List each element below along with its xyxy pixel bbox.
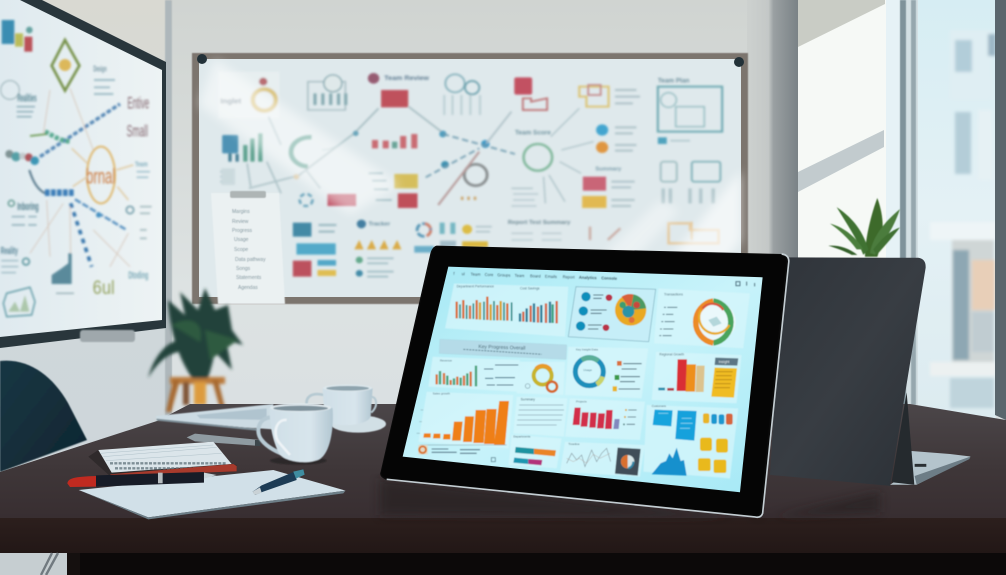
desk top — [0, 404, 1006, 518]
notebook red cover — [110, 464, 237, 476]
board mind-map drawing: Entive — [127, 93, 149, 112]
board mind-map drawing: Realities — [17, 93, 37, 105]
board mind-map drawing — [1, 20, 152, 317]
laptop behind the tablet — [770, 257, 971, 486]
small bar chart — [437, 359, 518, 386]
screen nav bar: Team — [515, 273, 525, 278]
laptop keyboard base — [890, 451, 971, 485]
blurred building — [930, 30, 996, 408]
donut chart: blue: Key Insight Data — [576, 347, 598, 351]
board infographic drawing: Team Review — [384, 75, 430, 82]
screen nav bar: Report — [563, 274, 576, 280]
screen nav bar: Analytics — [579, 275, 598, 280]
desk front edge — [0, 518, 1006, 553]
clipboard list text: Usage — [234, 237, 249, 243]
bar chart: grouped bars top left: Cost Savings — [520, 287, 540, 291]
board infographic drawing — [219, 72, 722, 277]
screen nav bar: Team — [471, 271, 481, 277]
screen glow panels — [418, 283, 750, 478]
banner heading: Key Progress Overall — [478, 344, 526, 352]
screen nav bar: Core — [485, 272, 494, 277]
stacked color strips: Departments — [513, 435, 531, 439]
cup handle — [307, 394, 324, 404]
text summary block: Summary — [521, 398, 535, 402]
coffee cup and saucer: back — [307, 384, 386, 433]
plant behind laptop — [828, 198, 900, 257]
left wall — [0, 0, 172, 470]
left whiteboard — [0, 0, 166, 348]
large orange bar chart — [417, 392, 509, 445]
clipboard clip — [230, 191, 266, 198]
ring chart: yellow — [525, 366, 557, 392]
clipboard list text: Songs — [236, 266, 251, 272]
blue info cards — [652, 404, 733, 441]
clipboard list text: Progress — [232, 228, 253, 234]
wall corner — [165, 0, 172, 420]
structural column — [747, 0, 798, 270]
cup body — [323, 385, 373, 425]
column chart: red orange tan — [658, 353, 705, 392]
blue info cards: Customers — [652, 404, 667, 408]
center whiteboard — [192, 53, 748, 304]
board tray — [80, 330, 135, 342]
tablet silver edge — [387, 254, 789, 517]
clipboard list text: Statements — [236, 275, 262, 281]
small bar chart: Revenue — [440, 359, 452, 363]
notebook — [88, 442, 237, 476]
donut legend — [617, 361, 622, 366]
board infographic drawing: Inglet — [220, 97, 242, 105]
banner heading — [439, 339, 567, 359]
board mind-map drawing: Team — [135, 160, 148, 169]
screen nav bar: Board — [530, 273, 541, 279]
screen contents — [417, 271, 755, 478]
board mind-map drawing: Dtoding — [128, 270, 148, 281]
cup shadow — [270, 457, 327, 465]
line chart: Timeline — [568, 442, 580, 446]
blue area chart — [652, 448, 687, 476]
bar chart: grouped bars top left — [457, 285, 557, 323]
screen nav icons — [736, 282, 755, 286]
window right frame — [995, 0, 1006, 420]
clipboard list text: Data pathway — [235, 257, 266, 263]
screen nav bar: Emails — [545, 274, 557, 279]
window: right pane with blurred building — [918, 0, 996, 420]
dark gauge card — [615, 448, 641, 476]
bar chart: grouped bars top left: Department Performance — [457, 285, 494, 289]
clipboard note — [211, 191, 285, 304]
insight card — [711, 358, 738, 398]
sunlight shafts on board — [199, 59, 741, 297]
cup body — [269, 404, 333, 462]
footer icon and summary — [418, 445, 495, 462]
tablet screen — [403, 267, 763, 492]
donut chart: blue — [575, 347, 642, 391]
board frame — [0, 0, 166, 348]
red bar chart: Projects — [576, 399, 587, 403]
plant stool — [166, 377, 226, 412]
sunlight shadow band: top — [798, 0, 885, 47]
screen nav bar: f — [453, 271, 455, 276]
notebook handwriting — [110, 463, 230, 468]
coffee cup: front — [258, 403, 333, 465]
board mind-map drawing: Small — [127, 122, 148, 141]
clipboard list text: Review — [232, 219, 249, 225]
cup handle — [258, 417, 287, 455]
board frame — [192, 53, 748, 304]
board infographic drawing: Team Score — [515, 130, 551, 137]
tablet with dashboard — [380, 246, 789, 518]
yellow tiles — [698, 438, 728, 473]
column chart: red orange tan: Regional Growth — [659, 353, 684, 357]
screen nav bar — [453, 271, 618, 281]
board infographic drawing: Tracker — [369, 222, 391, 228]
plant leaves — [148, 288, 243, 378]
window: bright left pane — [798, 0, 901, 270]
board mind-map drawing: Reality — [1, 246, 18, 257]
board mind-map drawing: Design — [93, 65, 107, 74]
line chart — [567, 442, 611, 467]
floor and shadow below desk — [0, 553, 1006, 575]
insight card: Insight — [719, 360, 729, 364]
tablet black bezel — [381, 247, 786, 516]
clipboard list text: Agendas — [238, 285, 258, 291]
small pill indicators — [703, 413, 709, 423]
screen nav bar: Groups — [497, 272, 510, 278]
soft shadow under tablet — [380, 478, 880, 520]
board corner pin: top left — [197, 54, 207, 64]
saucer — [331, 415, 386, 433]
board infographic drawing: Summary — [595, 167, 622, 173]
board infographic drawing: Report Test Summary — [508, 220, 571, 226]
stacked color strips — [513, 435, 556, 465]
text summary block — [517, 398, 564, 425]
donut chart: blue: Usage — [583, 368, 592, 372]
window mullion — [900, 0, 918, 405]
ring chart: top right: Transactions — [664, 293, 683, 297]
board mind-map drawing: 6ul — [93, 278, 115, 299]
ring chart: top right — [659, 293, 736, 343]
red bar chart — [573, 399, 637, 429]
tablet outer body — [380, 246, 789, 518]
pen: blue — [253, 469, 305, 495]
clipboard list text: Scope — [234, 247, 248, 253]
clipboard list text: Margins — [232, 209, 250, 215]
multicolor pie — [615, 294, 646, 326]
screen nav bar: Console — [601, 275, 618, 281]
large orange bar chart: Sales growth — [433, 392, 450, 396]
potted plant on stool — [148, 288, 243, 412]
board corner pin: top right — [734, 57, 744, 67]
board mind-map drawing: brnal — [86, 164, 115, 188]
pen on desk: silver — [187, 434, 260, 446]
screen nav bar: ul — [462, 271, 465, 276]
tablet on the back desk — [156, 404, 273, 431]
pen: red and black — [67, 472, 217, 487]
paper sheet — [79, 470, 346, 519]
metric icons — [581, 292, 591, 301]
chair — [0, 361, 87, 472]
clipboard list text — [232, 209, 266, 291]
board surface — [199, 59, 741, 297]
board mind-map drawing: Inboring — [17, 201, 39, 213]
sunlight shadow band: middle — [798, 130, 884, 192]
board infographic drawing: Team Plan — [658, 78, 690, 85]
tablet kickstand — [892, 392, 914, 485]
laptop lid back — [770, 257, 926, 486]
panel: key metrics with pie — [568, 287, 656, 342]
notebook pages — [98, 442, 232, 473]
board surface — [0, 0, 162, 337]
